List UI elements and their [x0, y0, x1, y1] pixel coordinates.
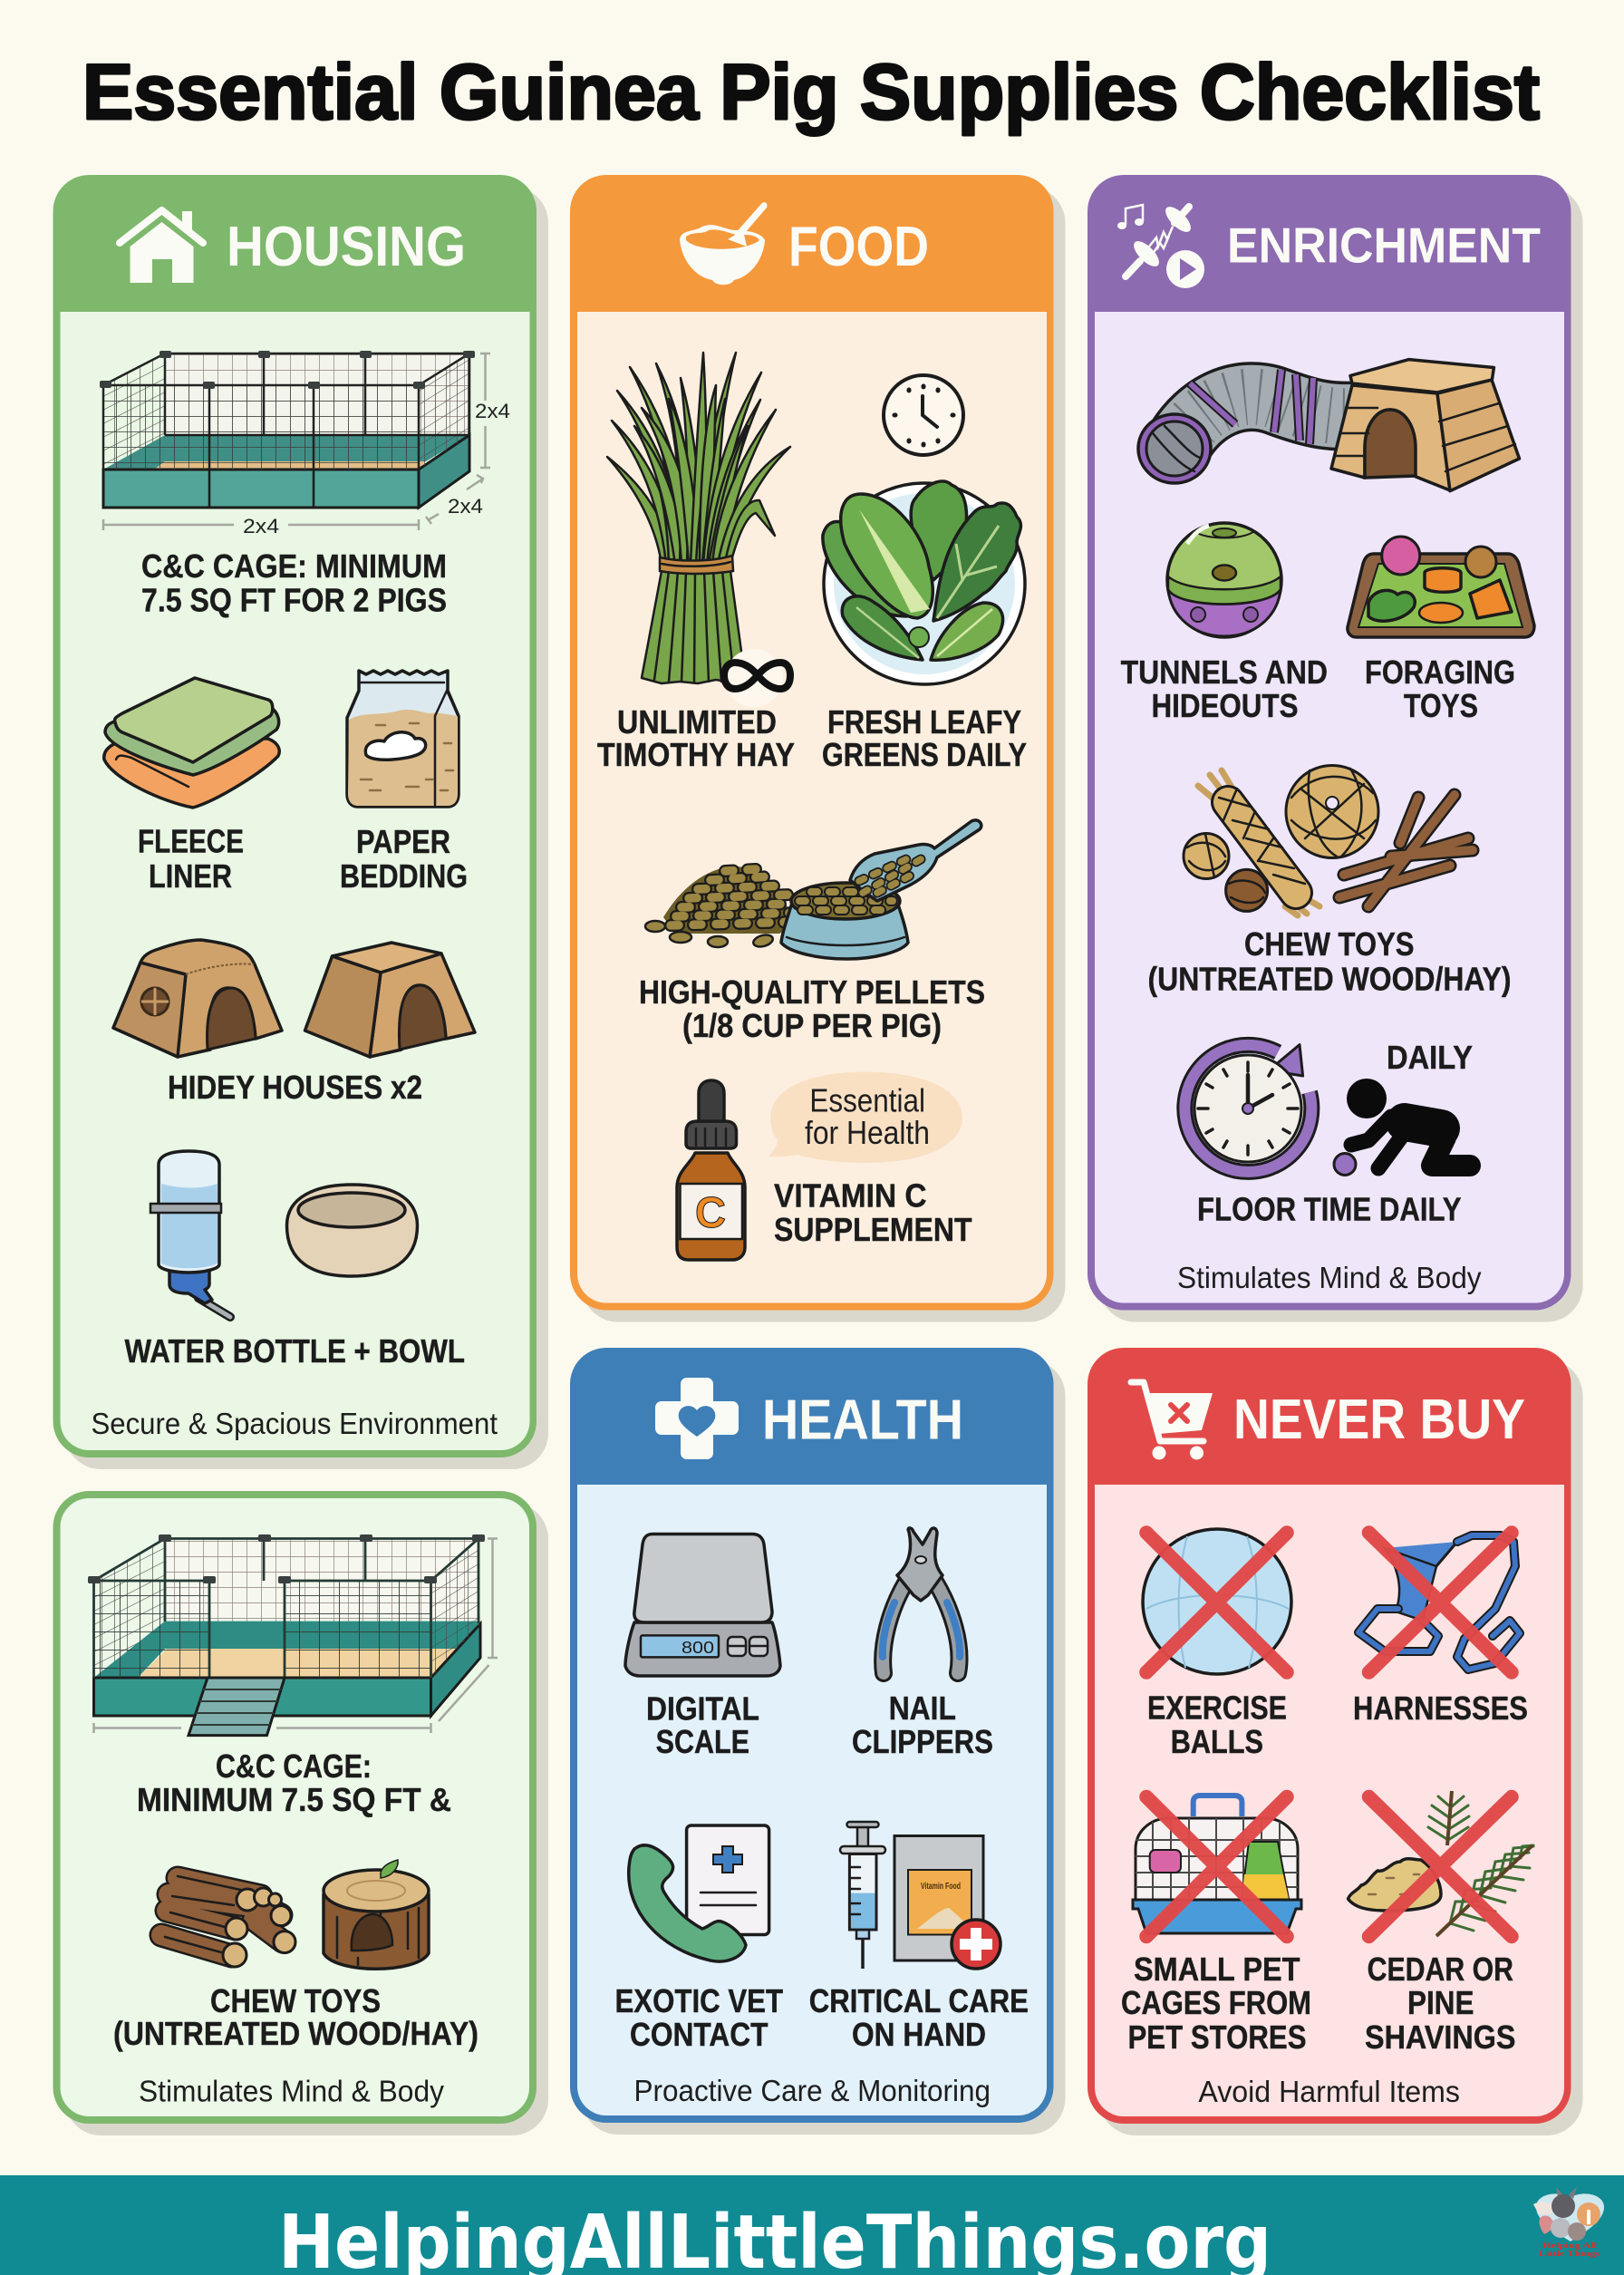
logo: Helping All — [1542, 2241, 1598, 2250]
icon: hidey house one — [113, 940, 282, 1057]
panel: housing — [53, 175, 548, 1469]
label: chew toys: CHEW TOYS — [210, 1982, 381, 2019]
icon: nail clippers — [883, 1528, 960, 1673]
label: unlimited timothy hay — [597, 703, 795, 773]
icon: fleece liner — [104, 678, 279, 808]
icon: enrichment toys — [1118, 203, 1204, 288]
label: exercise balls: EXERCISE — [1147, 1689, 1287, 1727]
label: tunnels and hideouts: TUNNELS AND — [1121, 653, 1328, 691]
illustration: chew toys — [1184, 765, 1473, 915]
label: daily: DAILY — [1387, 1039, 1473, 1076]
label: fleece liner — [138, 823, 244, 895]
caption: never buy: Avoid Harmful Items — [1198, 2075, 1460, 2108]
label: cage minimum: MINIMUM 7.5 SQ FT & — [137, 1781, 451, 1818]
illustration: C&C cage: 2x4 — [475, 400, 510, 422]
label: high quality pellets: HIGH-QUALITY PELLETS — [639, 973, 985, 1011]
label: exercise balls: BALLS — [1171, 1723, 1263, 1760]
panel: housing continued — [56, 1495, 548, 2135]
label: unlimited timothy hay: TIMOTHY HAY — [597, 736, 795, 773]
label: exotic vet contact: CONTACT — [630, 2016, 768, 2053]
illustration: tunnel and hideout — [1138, 360, 1519, 491]
label: small pet cages: SMALL PET — [1134, 1951, 1300, 1988]
icon: digital scale — [625, 1534, 780, 1676]
icon: clock — [884, 375, 963, 455]
icon: harness crossed out — [1358, 1533, 1520, 1672]
label: paper bedding — [340, 823, 468, 895]
label: chew toys: CHEW TOYS — [1244, 925, 1414, 963]
label: fleece liner: FLEECE — [138, 823, 244, 859]
panel: food — [570, 175, 1066, 1321]
label: vitamin c supplement: SUPPLEMENT — [774, 1211, 972, 1248]
label: small pet cages: PET STORES — [1127, 2018, 1307, 2056]
label: chew toys — [1147, 925, 1512, 998]
heading: food: FOOD — [788, 216, 929, 278]
label: nail clippers — [852, 1689, 993, 1760]
label: small pet cages — [1121, 1951, 1311, 2056]
label: digital scale — [646, 1689, 759, 1760]
label: cage minimum: C&C CAGE: — [216, 1747, 372, 1785]
caption: housing: Secure & Spacious Environment — [91, 1407, 498, 1440]
label: cage minimum — [137, 1747, 451, 1818]
label: fresh leafy greens daily — [822, 703, 1027, 773]
icon: vitamin C bottle: C — [695, 1189, 726, 1237]
label: vitamin c supplement: VITAMIN C — [774, 1176, 927, 1215]
label: fresh leafy greens daily: FRESH LEAFY — [827, 703, 1021, 741]
illustration: leafy greens — [823, 481, 1025, 684]
label: paper bedding: BEDDING — [340, 857, 468, 895]
label: chew toys: (UNTREATED WOOD/HAY) — [1147, 961, 1512, 998]
icon: small pet cage crossed out — [1133, 1796, 1301, 1936]
icon: house — [120, 210, 203, 283]
icon: vitamin C bottle — [677, 1080, 745, 1260]
label: exotic vet contact — [614, 1982, 783, 2053]
caption: health: Proactive Care & Monitoring — [634, 2074, 991, 2107]
icon: wooden logs — [161, 1876, 295, 1967]
caption: housing continued: Stimulates Mind & Body — [139, 2074, 444, 2108]
icon: floor time clock — [1184, 1045, 1311, 1172]
illustration: timothy hay — [607, 353, 790, 683]
icon: food bowl — [680, 202, 767, 285]
label: floor time daily: FLOOR TIME DAILY — [1197, 1191, 1461, 1227]
title: Essential Guinea Pig Supplies Checklist — [82, 49, 1540, 136]
label: tunnels and hideouts — [1121, 653, 1328, 724]
logo — [1533, 2187, 1604, 2258]
illustration: pellets and bowl — [645, 820, 981, 959]
caption: enrichment: Stimulates Mind & Body — [1177, 1261, 1482, 1294]
icon: shopping cart — [1131, 1382, 1213, 1459]
icon: syringe and critical care packet — [840, 1822, 1000, 1969]
callout: essential for health — [768, 1072, 962, 1163]
label: high quality pellets — [639, 973, 985, 1044]
label: hidey houses: HIDEY HOUSES x2 — [168, 1069, 422, 1106]
icon: infinity — [724, 649, 790, 707]
label: foraging toys: TOYS — [1404, 687, 1478, 724]
label: cedar or pine shavings — [1365, 1951, 1515, 2056]
label: digital scale: SCALE — [656, 1723, 749, 1760]
label: cedar or pine shavings: SHAVINGS — [1365, 2018, 1515, 2056]
icon: log hideout — [324, 1860, 429, 1969]
panel: health — [570, 1348, 1066, 2135]
callout: essential for health: Essential — [809, 1082, 925, 1119]
label: cage minimum — [141, 547, 447, 618]
panel: never buy — [1088, 1348, 1582, 2135]
icon: cedar and pine shavings crossed out — [1348, 1791, 1533, 1936]
panel: enrichment — [1088, 175, 1582, 1321]
label: tunnels and hideouts: HIDEOUTS — [1151, 687, 1298, 724]
icon: treat ball — [1167, 523, 1281, 637]
illustration: C&C cage — [100, 351, 510, 537]
label: critical care on hand — [809, 1982, 1029, 2053]
icon: floor time figure — [1334, 1079, 1470, 1175]
icon: exercise ball crossed out — [1143, 1529, 1291, 1674]
label: nail clippers: CLIPPERS — [852, 1723, 993, 1760]
icon: paper bedding — [347, 671, 459, 807]
label: foraging toys: FORAGING — [1365, 653, 1515, 691]
illustration: C&C cage: 2x4 — [448, 495, 483, 518]
icon: foraging tray — [1348, 537, 1534, 637]
label: cedar or pine shavings: CEDAR OR — [1368, 1951, 1513, 1988]
label: cage minimum: 7.5 SQ FT FOR 2 PIGS — [141, 582, 447, 618]
icon: hidey house two — [304, 943, 475, 1057]
illustration: C&C cage: 2x4 — [243, 515, 279, 537]
heading: health: HEALTH — [762, 1389, 963, 1452]
heading: housing: HOUSING — [227, 216, 466, 278]
logo: Little Things — [1539, 2249, 1600, 2258]
footer banner — [0, 2175, 1624, 2275]
label: exotic vet contact: EXOTIC VET — [614, 1982, 783, 2019]
label: unlimited timothy hay: UNLIMITED — [617, 703, 777, 741]
icon: medical cross with heart — [655, 1378, 739, 1459]
label: nail clippers: NAIL — [889, 1689, 956, 1727]
label: fresh leafy greens daily: GREENS DAILY — [822, 736, 1027, 773]
label: critical care on hand: ON HAND — [852, 2016, 986, 2053]
icon: water bottle — [150, 1151, 230, 1317]
label: fleece liner: LINER — [149, 857, 232, 895]
label: harnesses: HARNESSES — [1353, 1689, 1528, 1727]
label: water bottle and bowl: WATER BOTTLE + BOWL — [125, 1332, 465, 1370]
label: critical care on hand: CRITICAL CARE — [809, 1982, 1029, 2019]
label: paper bedding: PAPER — [356, 823, 450, 860]
label: foraging toys — [1365, 653, 1515, 724]
label: cage minimum: C&C CAGE: MINIMUM — [141, 547, 447, 585]
heading: never buy: NEVER BUY — [1233, 1389, 1525, 1451]
callout: essential for health: for Health — [805, 1114, 930, 1151]
icon: vet contact — [629, 1825, 769, 1961]
label: digital scale: DIGITAL — [646, 1689, 759, 1727]
icon: digital scale: 800 — [682, 1639, 714, 1657]
label: exercise balls — [1147, 1689, 1287, 1760]
label: small pet cages: CAGES FROM — [1121, 1984, 1311, 2021]
label: vitamin c supplement — [774, 1176, 972, 1248]
label: chew toys: (UNTREATED WOOD/HAY) — [113, 2015, 478, 2052]
icon: syringe and critical care packet: Vitamin Food — [921, 1882, 961, 1892]
label: chew toys — [113, 1982, 478, 2052]
label: cedar or pine shavings: PINE — [1407, 1984, 1474, 2021]
label: high quality pellets: (1/8 CUP PER PIG) — [682, 1007, 942, 1044]
heading: enrichment: ENRICHMENT — [1227, 218, 1541, 274]
illustration: C&C cage with ramp — [88, 1534, 498, 1736]
icon: bowl — [286, 1185, 417, 1276]
